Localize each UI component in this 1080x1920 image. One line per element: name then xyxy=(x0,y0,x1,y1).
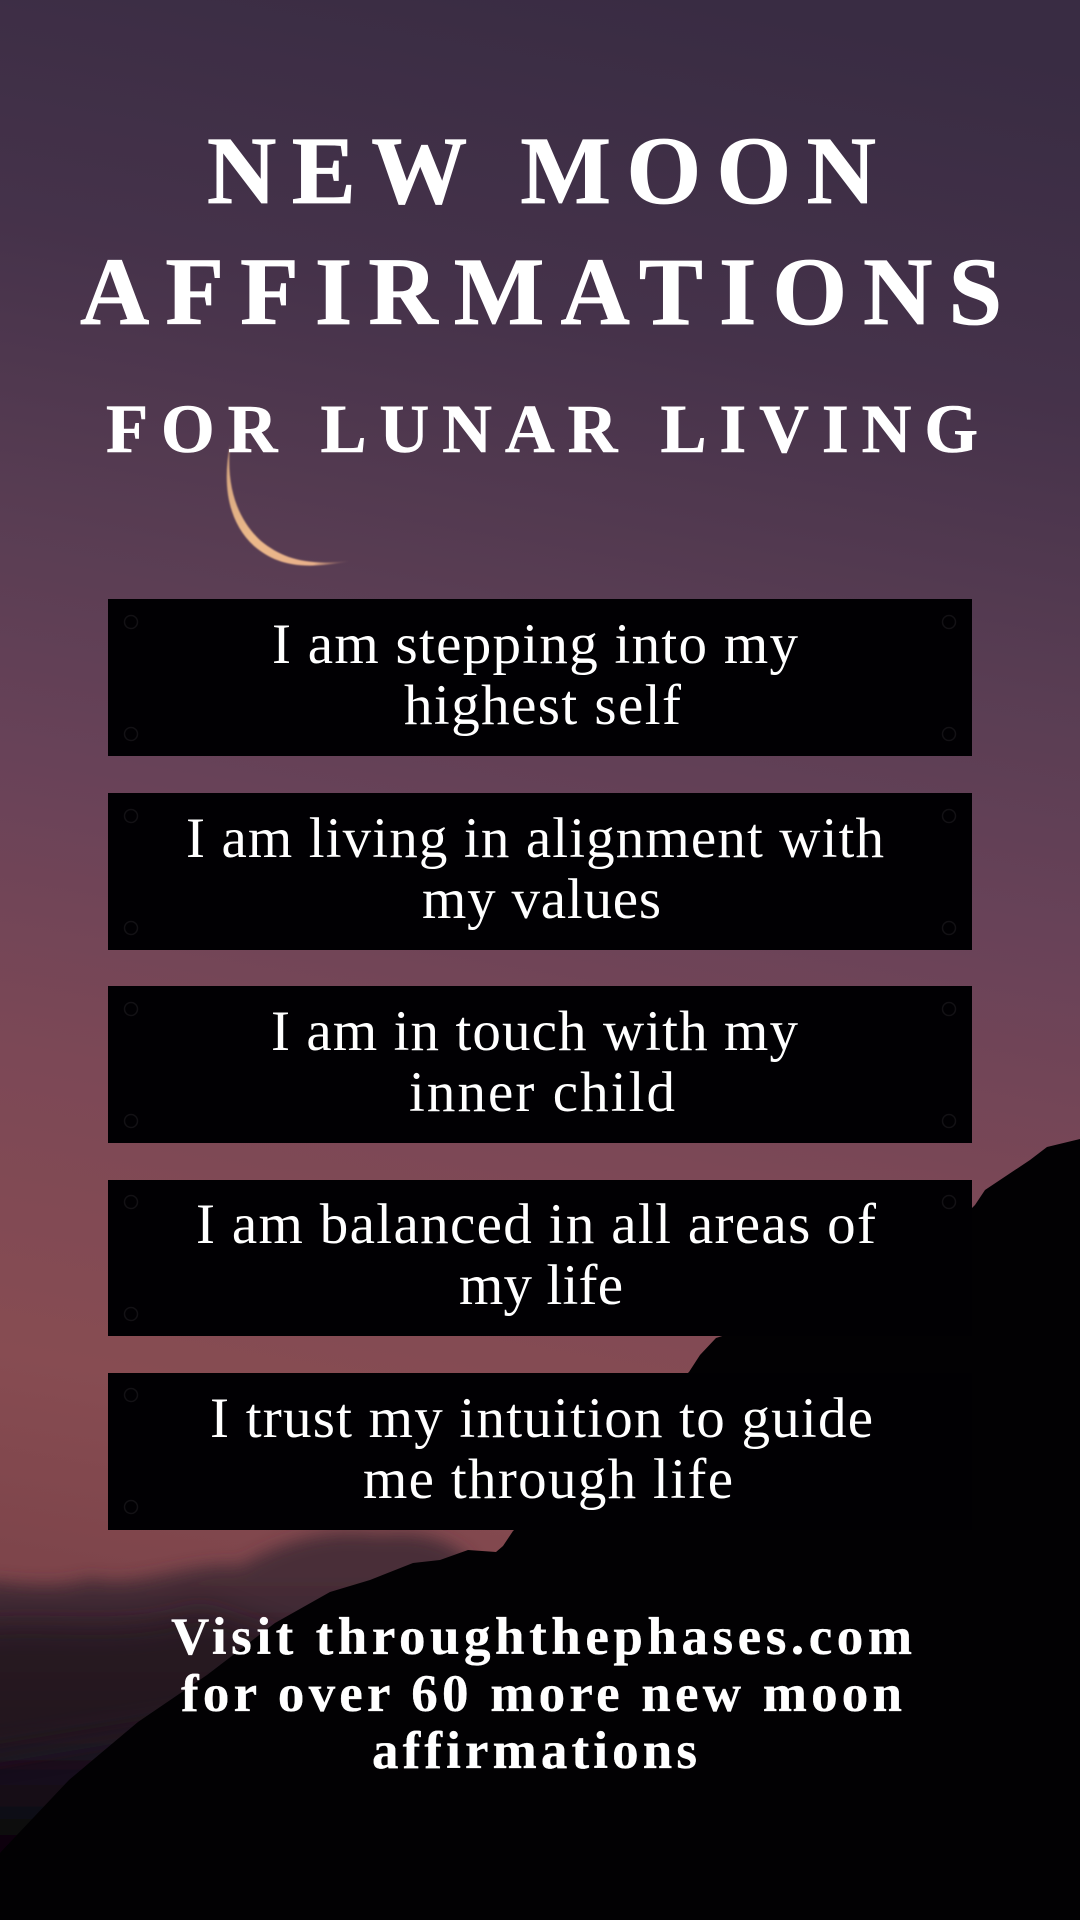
affirmation text 1 line 2: highest self xyxy=(404,674,681,737)
panel: affirmation 1 xyxy=(108,599,972,756)
affirmation text 3: I am in touch with my xyxy=(271,1000,798,1063)
panel: affirmation 2 xyxy=(108,793,972,950)
call to action line 2: for over 60 more new moon xyxy=(181,1665,902,1723)
panel: affirmation 3 xyxy=(108,986,972,1143)
title line: affirmations: AFFIRMATIONS xyxy=(80,238,1002,345)
panel: affirmation 5 xyxy=(108,1373,972,1530)
affirmation text 3 line 2: inner child xyxy=(409,1061,675,1124)
call to action line 1: Visit throughthephases.com xyxy=(171,1608,912,1666)
call to action xyxy=(171,1608,912,1780)
call to action line 3: affirmations xyxy=(372,1722,697,1780)
clouds xyxy=(0,1533,480,1920)
title line: new moon: NEW MOON xyxy=(207,117,876,224)
title xyxy=(80,117,1002,345)
affirmation text 4: I am balanced in all areas of xyxy=(196,1193,876,1256)
subtitle: FOR LUNAR LIVING xyxy=(106,391,978,467)
mountain silhouette xyxy=(0,1139,1080,1920)
affirmation text 4 line 2: my life xyxy=(459,1254,623,1317)
affirmation text 5 line 2: me through life xyxy=(363,1448,733,1511)
crescent moon xyxy=(227,445,350,566)
affirmation text 2: I am living in alignment with xyxy=(186,807,884,870)
panel: affirmation 4 xyxy=(108,1180,972,1336)
affirmation text 1: I am stepping into my xyxy=(272,613,798,676)
affirmation text 2 line 2: my values xyxy=(422,868,661,931)
affirmation text 5: I trust my intuition to guide xyxy=(210,1387,873,1450)
